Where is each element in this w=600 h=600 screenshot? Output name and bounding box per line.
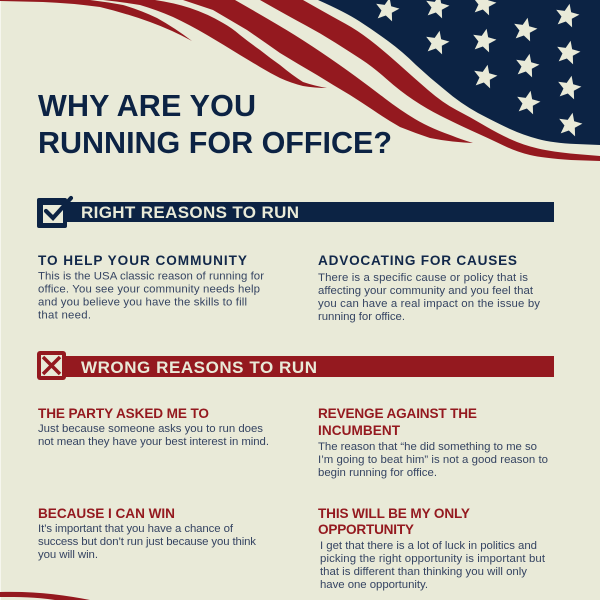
bottom red stripe: [0, 592, 90, 600]
block: to help your community: and you believe you have the skills to fill: [38, 296, 247, 308]
title: RUNNING FOR OFFICE?: [38, 126, 392, 160]
block: to help your community: that need.: [38, 310, 91, 322]
block: revenge against the incumbent: INCUMBENT: [318, 423, 401, 438]
block: because i can win: you will win.: [38, 549, 98, 561]
stars: [373, 0, 584, 137]
block: revenge against the incumbent: I’m going to beat him” is not a good reason to: [318, 454, 548, 466]
block: because i can win: success but don’t run just because you think: [38, 536, 256, 548]
block: advocating for causes: running for office.: [318, 311, 405, 323]
block: this will be my only opportunity: OPPORTUNITY: [318, 522, 414, 537]
block: revenge against the incumbent: [318, 406, 548, 479]
block: because i can win: [38, 506, 256, 561]
icon: check box: [37, 198, 71, 228]
title: [38, 89, 392, 160]
block: the party asked me to: [38, 406, 269, 448]
block: to help your community: TO HELP YOUR COMMUNITY: [38, 253, 247, 268]
block: this will be my only opportunity: [318, 506, 546, 591]
red stripes: [0, 0, 600, 161]
block: advocating for causes: [318, 253, 540, 323]
block: this will be my only opportunity: that is different than thinking you will only: [320, 566, 527, 578]
header text: WRONG REASONS TO RUN: [81, 358, 317, 377]
block: this will be my only opportunity: THIS WILL BE MY ONLY: [318, 506, 470, 521]
block: this will be my only opportunity: have one opportunity.: [320, 579, 428, 591]
block: to help your community: [38, 253, 264, 322]
icon: x box: [37, 351, 66, 380]
block: the party asked me to: not mean they have your best interest in mind.: [38, 436, 269, 448]
block: because i can win: BECAUSE I CAN WIN: [38, 506, 175, 521]
header text: RIGHT REASONS TO RUN: [81, 203, 299, 222]
section header: right reasons: [37, 198, 554, 228]
block: the party asked me to: THE PARTY ASKED ME TO: [38, 406, 209, 421]
block: advocating for causes: affecting your community and you feel that: [318, 285, 534, 297]
block: the party asked me to: Just because someone asks you to run does: [38, 423, 263, 435]
block: revenge against the incumbent: begin running for office.: [318, 467, 437, 479]
block: because i can win: It’s important that you have a chance of: [38, 523, 234, 535]
title: WHY ARE YOU: [38, 89, 256, 123]
block: to help your community: office. You see your community needs help: [38, 284, 260, 296]
section header: wrong reasons: [37, 351, 554, 380]
header bar: [60, 202, 554, 222]
block: advocating for causes: There is a specific cause or policy that is: [318, 272, 528, 284]
block: advocating for causes: ADVOCATING FOR CAUSES: [318, 253, 517, 268]
header bar: [60, 356, 554, 377]
flag banner: [0, 0, 600, 161]
block: advocating for causes: you can have a real impact on the issue by: [318, 298, 540, 310]
navy star field: [318, 0, 600, 145]
block: this will be my only opportunity: I get that there is a lot of luck in politics and: [320, 540, 537, 552]
block: this will be my only opportunity: picking the right opportunity is important but: [320, 553, 546, 565]
block: revenge against the incumbent: REVENGE AGAINST THE: [318, 406, 477, 421]
block: revenge against the incumbent: The reason that “he did something to me so: [318, 441, 537, 453]
block: to help your community: This is the USA classic reason of running for: [38, 270, 264, 282]
